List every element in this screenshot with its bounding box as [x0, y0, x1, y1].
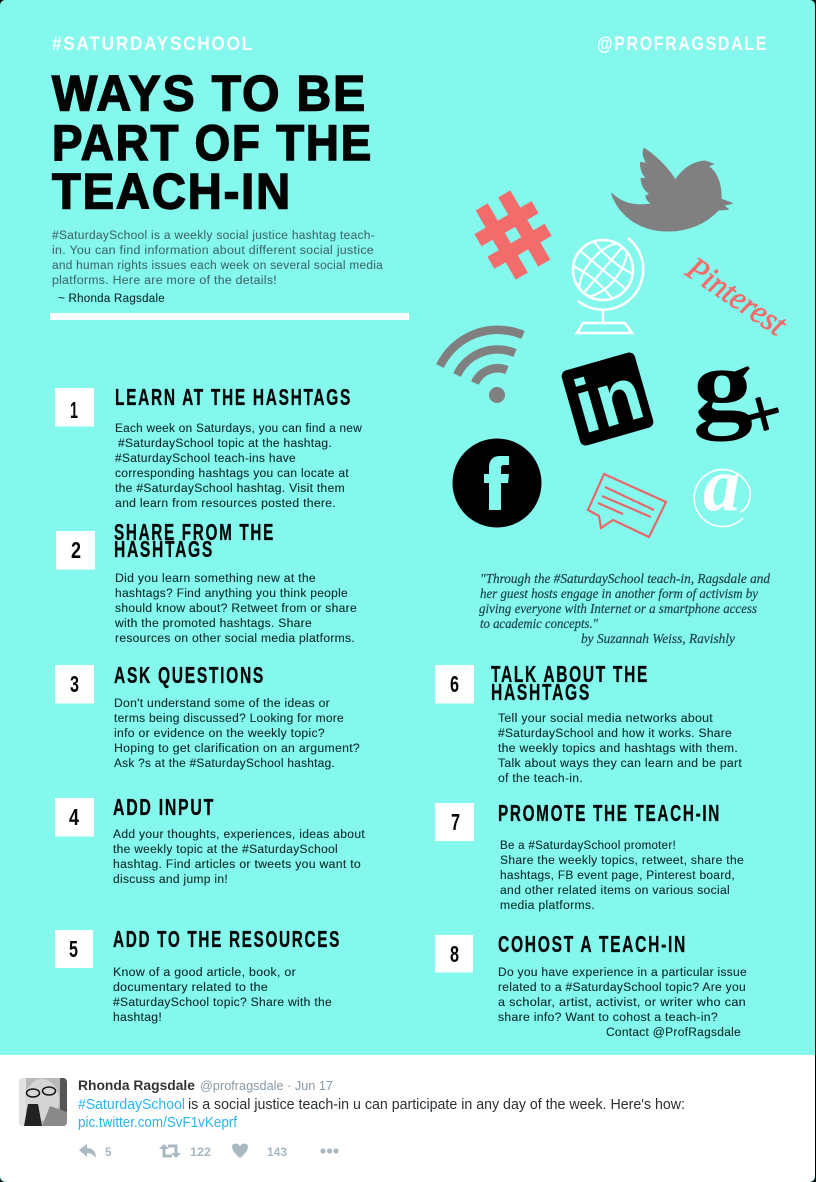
icon: twitter bird [612, 148, 732, 231]
number 6 [435, 665, 474, 704]
body 6 [498, 711, 742, 785]
number 7 [435, 803, 474, 841]
heading 6: TALK ABOUT THE [491, 661, 649, 687]
heading 2 [114, 519, 275, 562]
icon: reply [79, 1144, 96, 1158]
icon: facebook [452, 438, 542, 528]
number 5 [55, 930, 93, 968]
body 4: the weekly topic at the #SaturdaySchool [113, 842, 338, 856]
tweet author: Rhonda Ragsdale [78, 1078, 195, 1093]
intro text: #SaturdaySchool is a weekly social justice hashtag teach- [52, 228, 375, 242]
body 8: Do you have experience in a particular issue [498, 965, 747, 979]
divider bar [50, 313, 409, 320]
heading 5: ADD TO THE RESOURCES [113, 926, 341, 952]
body 5: documentary related to the [113, 980, 268, 994]
number 3 [55, 665, 94, 704]
body 6: of the teach-in. [498, 771, 583, 785]
intro attribution: ~ Rhonda Ragsdale [58, 291, 165, 305]
tweet actions: 122 [190, 1147, 211, 1159]
number 8 [435, 935, 473, 972]
body 7: media platforms. [500, 898, 595, 912]
body 4: discuss and jump in! [113, 872, 228, 886]
body 1: and learn from resources posted there. [115, 496, 336, 510]
title [52, 66, 373, 220]
quote: her guest hosts engage in another form of activism by [480, 586, 758, 601]
body 3: Hoping to get clarification on an argument? [114, 741, 360, 755]
body 2 [114, 571, 357, 645]
tweet link: pic.twitter.com/SvF1vKeprf [78, 1115, 238, 1131]
tweet actions: 143 [267, 1147, 287, 1159]
icon: google plus [693, 328, 783, 442]
number 7: 7 [451, 809, 460, 835]
tweet panel [0, 1055, 815, 1182]
body 8: share info? Want to cohost a teach-in? [498, 1010, 718, 1024]
intro text [52, 228, 383, 287]
body 4: Add your thoughts, experiences, ideas about [113, 827, 365, 841]
body 5: hashtag! [113, 1010, 162, 1024]
body 2: should know about? Retweet from or share [115, 601, 357, 615]
body 6: Talk about ways they can learn and be part [498, 756, 742, 770]
number 4 [55, 798, 94, 836]
heading 6 [491, 661, 649, 705]
icon: at sign [694, 443, 750, 527]
quote: to academic concepts." [480, 616, 598, 631]
number 1: 1 [70, 397, 78, 423]
step 3 [55, 662, 360, 770]
body 7: Be a #SaturdaySchool promoter! [500, 838, 676, 852]
icon: more dots [320, 1148, 339, 1154]
body 7: Share the weekly topics, retweet, share the [500, 853, 744, 867]
step 1 [55, 384, 362, 510]
icon: hashtag [464, 184, 562, 286]
header: hashtag: #SATURDAYSCHOOL [52, 34, 254, 55]
heading 4: ADD INPUT [113, 794, 215, 820]
number 2: 2 [71, 537, 81, 563]
body 4: hashtag. Find articles or tweets you want to [113, 857, 361, 871]
body 7: and other related items on various social [500, 883, 730, 897]
body 5 [113, 965, 332, 1024]
icon: at sign: a [703, 443, 740, 527]
title: WAYS TO BE [52, 66, 367, 122]
icon: chat bubble [588, 474, 666, 537]
body 5: Know of a good article, book, or [113, 965, 296, 979]
step 2 [56, 519, 357, 645]
step 4 [55, 794, 365, 886]
tweet hashtag: #SaturdaySchool [78, 1097, 185, 1113]
body 1: #SaturdaySchool topic at the hashtag. [118, 436, 332, 450]
body 3: Ask ?s at the #SaturdaySchool hashtag. [114, 756, 335, 770]
body 1: #SaturdaySchool teach-ins have [115, 451, 296, 465]
heading 1: LEARN AT THE HASHTAGS [115, 384, 352, 410]
body 6: the weekly topics and hashtags with them. [498, 741, 738, 755]
heading 2: HASHTAGS [114, 536, 214, 562]
header: handle: @PROFRAGSDALE [597, 34, 768, 55]
body 8: related to a #SaturdaySchool topic? Are you [498, 980, 746, 994]
body 7 [500, 838, 744, 912]
number 2 [56, 531, 95, 570]
tweet handle and date: @profragsdale · Jun 17 [200, 1078, 333, 1093]
number 6: 6 [450, 671, 459, 697]
number 4: 4 [69, 804, 79, 830]
number 5: 5 [69, 936, 78, 962]
icon: pinterest wordmark: Pinterest [679, 250, 793, 344]
quote: "Through the #SaturdaySchool teach-in, Ragsdale and [480, 571, 770, 586]
quote: giving everyone with Internet or a smartphone access [479, 601, 757, 616]
number 8: 8 [450, 941, 459, 967]
icon: google plus: g [693, 328, 753, 442]
step 6 [435, 661, 742, 785]
icon: linkedin: in [565, 350, 652, 450]
tweet avatar [19, 1078, 67, 1126]
body 5: #SaturdaySchool topic? Share with the [113, 995, 332, 1009]
body 8: a scholar, artist, activist, or writer who can [498, 995, 746, 1009]
heading 8: COHOST A TEACH-IN [498, 931, 687, 957]
step 5 [55, 926, 341, 1024]
step 8 [435, 931, 747, 1039]
number 1 [55, 388, 94, 426]
heading 3: ASK QUESTIONS [114, 662, 265, 688]
intro text: platforms. Here are more of the details! [52, 273, 277, 287]
body 6: #SaturdaySchool and how it works. Share [498, 726, 732, 740]
body 1: the #SaturdaySchool hashtag. Visit them [115, 481, 345, 495]
body 2: with the promoted hashtags. Share [114, 616, 312, 630]
body 1 [115, 421, 362, 510]
body 1: Each week on Saturdays, you can find a new [115, 421, 362, 435]
step 7 [435, 800, 744, 912]
body 6: Tell your social media networks about [498, 711, 713, 725]
body 1: corresponding hashtags you can locate at [115, 466, 349, 480]
body 2: hashtags? Find anything you think people [115, 586, 348, 600]
tweet actions: 5 [105, 1147, 112, 1159]
icon: wifi [440, 330, 523, 403]
tweet message: is a social justice teach-in u can participate in any day of the week. Here's how: [188, 1097, 685, 1113]
heading 2: SHARE FROM THE [114, 519, 275, 545]
title: PART OF THE [52, 115, 373, 171]
quote [479, 571, 770, 646]
body 7: hashtags, FB event page, Pinterest board, [500, 868, 735, 882]
body 3 [114, 696, 360, 770]
title: TEACH-IN [52, 164, 292, 220]
tweet actions [79, 1143, 339, 1159]
body 8 [498, 965, 747, 1039]
body 3: info or evidence on the weekly topic? [114, 726, 325, 740]
body 4 [113, 827, 365, 886]
quote: by Suzannah Weiss, Ravishly [581, 631, 735, 646]
icon: heart [232, 1143, 248, 1158]
heading 6: HASHTAGS [491, 679, 591, 705]
number 3: 3 [70, 671, 79, 697]
body 3: Don't understand some of the ideas or [114, 696, 330, 710]
icon: retweet [159, 1144, 181, 1158]
intro text: in. You can find information about different social justice [52, 243, 374, 257]
body 3: terms being discussed? Looking for more [114, 711, 344, 725]
intro text: and human rights issues each week on several social media [52, 258, 383, 272]
body 8: Contact @ProfRagsdale [606, 1025, 741, 1039]
body 2: resources on other social media platforms. [115, 631, 355, 645]
body 2: Did you learn something new at the [115, 571, 316, 585]
icon: globe [572, 237, 644, 334]
